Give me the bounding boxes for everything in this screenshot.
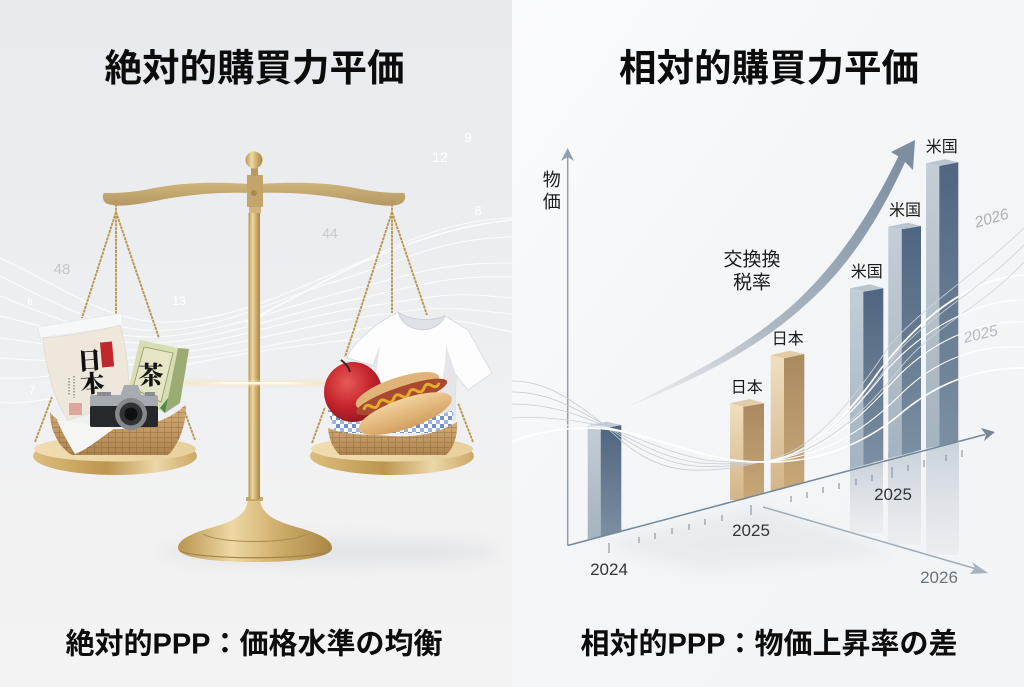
bar labels: 日本 <box>731 378 763 396</box>
bar labels <box>731 138 958 396</box>
hot dog <box>347 362 457 444</box>
t-shirt <box>347 312 492 420</box>
price axis <box>561 148 574 546</box>
price axis label <box>543 170 561 212</box>
basket front <box>328 422 457 455</box>
scale base <box>178 497 332 562</box>
scale joint and knob <box>246 152 263 213</box>
year labels <box>590 485 958 587</box>
bar: 2024 <box>588 422 621 539</box>
title: relative PPP: 相対的購買力平価 <box>619 47 919 89</box>
exchange rate label: 交換換 <box>723 248 781 270</box>
balance scale <box>33 152 500 566</box>
year labels: 2024 <box>590 560 628 579</box>
faint rotated year labels: 2026 <box>972 206 1011 232</box>
left pan <box>33 436 197 475</box>
year labels: 2025 <box>874 485 912 504</box>
towel <box>57 420 115 454</box>
flowing data waves <box>512 228 1024 470</box>
exchange rate curved arrow <box>627 140 915 407</box>
faint numbers: left panel: 6 <box>27 297 33 307</box>
price axis label: 価 <box>543 192 561 212</box>
basket front <box>50 405 186 455</box>
basket back rim <box>48 405 186 432</box>
t-shirt shading <box>372 345 456 420</box>
bar labels: 米国 <box>926 138 958 156</box>
faint rotated year labels <box>961 206 1011 347</box>
scale shadow <box>160 538 500 566</box>
scale beam <box>103 183 405 206</box>
exchange rate label <box>723 248 781 294</box>
faint numbers: left panel: 13 <box>172 294 186 308</box>
t-shirt collar <box>398 312 445 330</box>
apple <box>324 360 382 422</box>
panel: relative PPP background <box>512 0 1024 687</box>
scale pole <box>248 213 260 499</box>
axis ticks <box>609 450 962 553</box>
caption: absolute PPP: 絶対的PPP：価格水準の均衡 <box>65 628 443 660</box>
bar: Japan 1 <box>730 399 764 500</box>
faint numbers: left panel: 9 <box>464 130 472 145</box>
price axis label: 物 <box>543 170 561 190</box>
tea box <box>127 340 189 413</box>
gingham cloth <box>328 410 454 433</box>
faint numbers: left panel: 44 <box>322 225 338 241</box>
faint rotated year labels: 2025 <box>961 322 1000 347</box>
bar: Japan 2 <box>771 351 804 491</box>
reflections under US bars <box>850 443 959 555</box>
faint numbers: left panel: 12 <box>432 149 448 165</box>
right basket contents <box>324 312 492 455</box>
bar: US 3 <box>926 159 958 448</box>
glowing balance line <box>185 380 327 386</box>
panel: absolute PPP background <box>0 0 512 687</box>
faint numbers: left panel <box>27 130 482 397</box>
right chains <box>312 200 473 443</box>
tea box: 茶 <box>138 356 164 392</box>
year labels: 2025 <box>732 521 770 540</box>
bar labels: 日本 <box>772 330 804 348</box>
right pan <box>310 436 474 475</box>
relative PPP chart <box>512 138 1024 587</box>
left chains <box>35 200 195 442</box>
floor shadow <box>600 505 900 570</box>
exchange rate label: 税率 <box>733 272 771 294</box>
bar labels: 米国 <box>889 202 921 220</box>
bar labels: 米国 <box>851 263 883 281</box>
rice bag <box>38 313 130 420</box>
faint numbers: left panel: 8 <box>474 203 482 218</box>
left basket contents <box>38 313 189 455</box>
rice bag: 日 <box>76 340 102 377</box>
year labels: 2026 <box>920 568 958 587</box>
bar: US 2 <box>888 223 921 458</box>
caption: relative PPP: 相対的PPP：物価上昇率の差 <box>580 628 958 660</box>
bar: US 1 <box>850 284 883 469</box>
background waves: left panel <box>0 218 512 403</box>
time axis <box>568 428 995 546</box>
camera <box>90 385 158 430</box>
faint numbers: left panel: 7 <box>29 383 36 397</box>
depth axis <box>763 507 988 574</box>
title: absolute PPP: 絶対的購買力平価 <box>104 47 404 89</box>
rice bag: 本 <box>79 363 105 400</box>
faint numbers: left panel: 48 <box>54 261 70 278</box>
